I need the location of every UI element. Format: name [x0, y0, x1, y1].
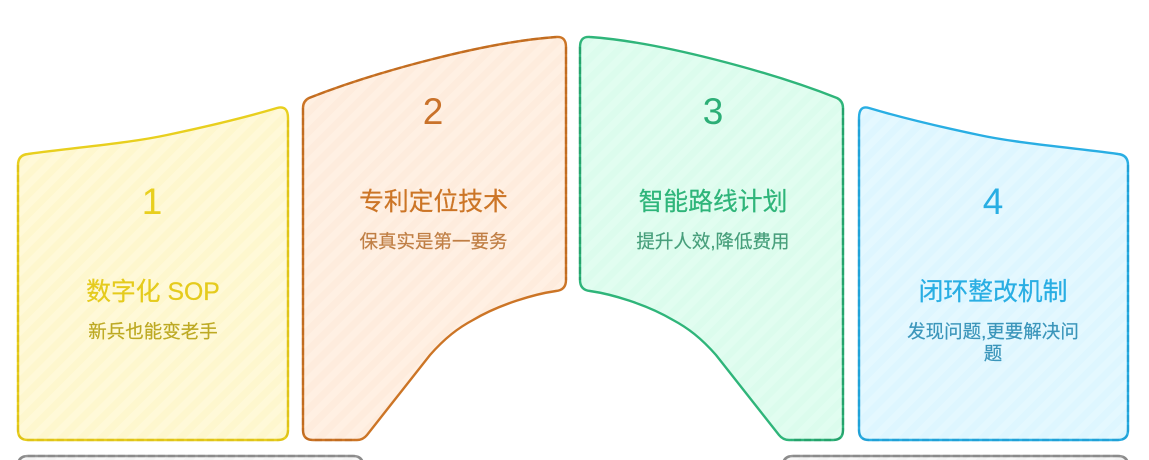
- card 1 title: 数字化 SOP: [86, 278, 220, 306]
- card 3 number: 3: [703, 91, 723, 132]
- panel: card 3 smart route planning: [580, 37, 843, 440]
- card 1 subtitle: 新兵也能变老手: [88, 321, 218, 342]
- card 4 subtitle: 发现问题,更要解决问: [907, 321, 1079, 342]
- panel: card 4 closed-loop rectification: [859, 107, 1128, 440]
- panel: bottom right card clipped: [783, 456, 1128, 460]
- card 4 title: 闭环整改机制: [919, 278, 1067, 306]
- card 4 subtitle: 题: [984, 343, 1002, 364]
- card 4 subtitle: [907, 321, 1079, 364]
- card 3 title: 智能路线计划: [639, 188, 787, 216]
- card 2 subtitle: 保真实是第一要务: [359, 231, 508, 252]
- panel: card 1 digital SOP: [18, 107, 288, 440]
- panel: card 2 patent positioning: [303, 37, 566, 440]
- card 2 number: 2: [423, 91, 443, 132]
- panel: bottom left card clipped: [18, 456, 363, 460]
- card 1 number: 1: [142, 181, 162, 222]
- card 2 title: 专利定位技术: [359, 188, 508, 216]
- card 3 subtitle: 提升人效,降低费用: [636, 231, 790, 252]
- card 4 number: 4: [983, 181, 1003, 222]
